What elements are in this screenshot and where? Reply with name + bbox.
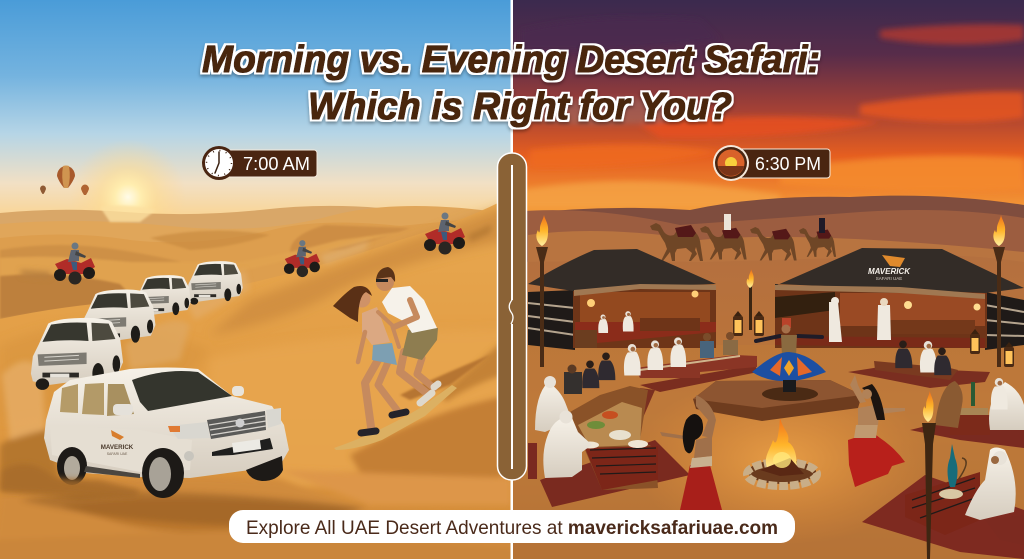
title bbox=[202, 39, 820, 128]
sunset clouds bbox=[520, 18, 1024, 208]
camp sand bbox=[511, 255, 1024, 559]
stage bbox=[693, 380, 862, 421]
tent logo: MAVERICK bbox=[868, 267, 911, 276]
morning time badge: 7:00 AM bbox=[243, 154, 310, 174]
sandboard bbox=[334, 385, 457, 450]
right dining table front bbox=[910, 378, 1024, 448]
tent logo: SAFARI UAE bbox=[876, 276, 902, 281]
icon: sunset bbox=[713, 145, 749, 181]
campfire bbox=[747, 418, 817, 486]
tent left bbox=[528, 249, 716, 350]
tent logo bbox=[868, 255, 911, 281]
dancer left bbox=[660, 395, 722, 510]
hot air balloons bbox=[40, 166, 89, 195]
panel: morning safari bbox=[0, 0, 520, 559]
low dining table back left bbox=[564, 332, 758, 394]
van logo: SAFARI UAE bbox=[107, 452, 128, 456]
man bbox=[400, 352, 428, 394]
foreground dust bbox=[0, 466, 139, 494]
morning sun bbox=[80, 144, 176, 208]
right rug and hookah table bbox=[862, 444, 1024, 559]
board spray bbox=[400, 355, 490, 400]
convoy of white SUVs bbox=[31, 261, 243, 390]
dust trails bbox=[0, 224, 492, 500]
torches bbox=[536, 215, 1005, 367]
long dining table left bbox=[528, 376, 690, 507]
morning time badge bbox=[202, 146, 317, 180]
main SUV bbox=[20, 368, 365, 526]
front torch bbox=[922, 391, 936, 559]
evening dunes bbox=[511, 196, 1024, 300]
distant dunes bbox=[0, 206, 378, 229]
evening time badge: 6:30 PM bbox=[755, 154, 821, 174]
fire glow bbox=[666, 409, 899, 528]
evening time badge bbox=[713, 145, 830, 181]
lanterns bbox=[733, 311, 1014, 367]
icon: clock bbox=[202, 146, 236, 180]
morning sky bbox=[0, 0, 511, 216]
whirling dervish bbox=[752, 318, 826, 392]
title: Which is Right for You? bbox=[308, 86, 732, 128]
main dune slope bbox=[0, 204, 510, 510]
right dining table back bbox=[848, 340, 990, 388]
evening sky bbox=[511, 0, 1024, 216]
shaded mid dune bbox=[0, 274, 135, 319]
dancer right bbox=[848, 375, 905, 487]
sandboarders bbox=[333, 267, 438, 433]
camels bbox=[650, 214, 836, 261]
divider capsule bbox=[498, 0, 526, 559]
van logo bbox=[101, 430, 134, 456]
quad bikes bbox=[54, 212, 465, 284]
van logo: MAVERICK bbox=[101, 444, 134, 451]
panel: evening safari bbox=[511, 0, 1024, 559]
website call to action: Explore All UAE Desert Adventures at mavericksafariuae.com bbox=[246, 517, 778, 539]
title: Morning vs. Evening Desert Safari: bbox=[202, 39, 820, 81]
main dune light and shadow bbox=[212, 202, 497, 487]
soft dune shading bbox=[0, 205, 406, 262]
tent right bbox=[775, 248, 1024, 350]
woman bbox=[365, 360, 378, 427]
website call to action bbox=[229, 510, 795, 543]
